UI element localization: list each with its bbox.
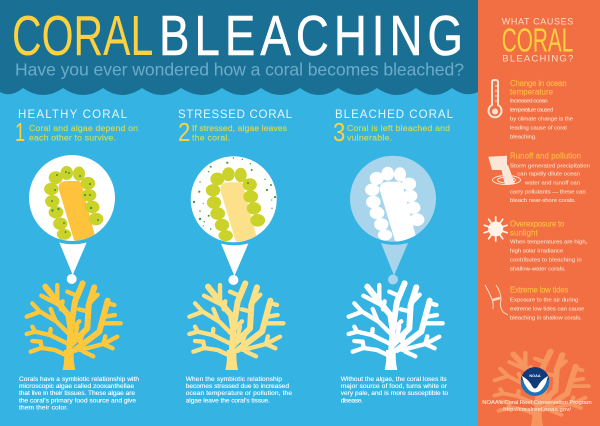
healthy coral description: [19, 376, 139, 411]
bleached coral description: [341, 376, 448, 404]
column 2 heading: STRESSED CORAL: [178, 109, 293, 121]
cause: overexposure to sunlight: [510, 220, 588, 272]
cause: change in ocean temperature: Change in ocean: [510, 79, 567, 88]
cause: change in ocean temperature: by climate change is the: [510, 116, 574, 122]
magnifier: bleached coral polyp: [350, 156, 436, 284]
column 3 heading: BLEACHED CORAL: [335, 109, 454, 121]
column 1 heading: HEALTHY CORAL: [18, 109, 128, 121]
cause: change in ocean temperature: temperature caused: [510, 108, 553, 114]
sidebar heading: WHAT CAUSES: [502, 16, 573, 26]
healthy coral description: the coral's primary food source and give: [19, 397, 136, 404]
cause: overexposure to sunlight: When temperatures are high,: [510, 240, 588, 246]
cause: extreme low tides: Exposure to the air during: [510, 298, 578, 304]
stressed coral description: When the symbiotic relationship: [186, 376, 282, 383]
header band with scalloped edge: [0, 0, 478, 95]
title: [12, 3, 463, 68]
stressed coral description: algae leave the coral's tissue.: [186, 397, 270, 404]
bleached coral description: Without the algae, the coral loses its: [341, 376, 447, 383]
column 1 heading: each other to survive.: [29, 132, 116, 142]
icon: low tide shoreline: [485, 285, 508, 315]
cause: runoff and pollution: water and runoff can: [524, 181, 580, 187]
icon: runoff bucket and ripples: [488, 156, 520, 185]
cause: change in ocean temperature: Increased ocean: [510, 99, 548, 105]
icon: sun: [484, 217, 507, 241]
NOAA program credit: [482, 400, 592, 413]
NOAA program credit: http://coralreef.noaa.gov/: [503, 407, 571, 413]
column 1 heading: Coral and algae depend on: [29, 123, 138, 133]
cause: change in ocean temperature: [510, 79, 574, 140]
column 1 heading: [15, 109, 138, 147]
magnifier: stressed coral polyp: [191, 156, 277, 285]
subtitle: Have you ever wondered how a coral becomes bleached?: [15, 60, 464, 80]
cause: runoff and pollution: bleach near-shore corals.: [510, 198, 576, 204]
healthy coral description: that live in their tissues. These algae are: [19, 390, 135, 397]
sidebar panel: what causes coral bleaching: [478, 0, 600, 426]
cause: extreme low tides: bleaching in shallow corals.: [510, 316, 582, 322]
icon: thermometer: [489, 80, 502, 117]
cause: change in ocean temperature: leading cause of coral: [510, 126, 567, 132]
column 3 heading: vulnerable.: [347, 132, 392, 142]
column 2 heading: [178, 109, 293, 147]
cause: overexposure to sunlight: high solar irradiance: [510, 249, 564, 255]
bleached coral description: very pale, and is more susceptible to: [341, 390, 448, 397]
cause: runoff and pollution: [510, 151, 590, 204]
column 2 heading: If stressed, algae leaves: [192, 123, 288, 133]
healthy coral description: them their color.: [19, 404, 68, 411]
cause: extreme low tides: [510, 285, 585, 322]
NOAA program credit: NOAA's Coral Reef Conservation Program: [482, 400, 592, 406]
cause: overexposure to sunlight: shallow-water corals.: [510, 266, 566, 272]
cause: runoff and pollution: Runoff and pollution: [510, 151, 581, 160]
column 3 heading: 3: [333, 118, 345, 147]
cause: extreme low tides: Extreme low tides: [510, 285, 568, 294]
bleached coral description: major source of food, turns white or: [341, 383, 448, 390]
cause: change in ocean temperature: bleaching.: [510, 134, 537, 140]
NOAA logo: NOAA: [529, 374, 541, 378]
column 2 heading: 2: [178, 118, 190, 147]
column 3 heading: Coral is left bleached and: [347, 123, 450, 133]
stressed coral illustration: [189, 283, 283, 370]
cause: runoff and pollution: Storm generated precipitation: [510, 163, 590, 169]
cause: overexposure to sunlight: sunlight: [510, 229, 539, 238]
cause: runoff and pollution: can rapidly dilute ocean: [517, 172, 580, 178]
title: CORAL: [12, 3, 153, 68]
stressed coral description: ocean temperature or pollution, the: [186, 390, 292, 397]
stressed coral description: [186, 376, 292, 404]
NOAA logo: [521, 367, 549, 396]
bleached coral description: disease.: [341, 397, 363, 404]
title: BLEACHING: [159, 3, 463, 67]
healthy coral illustration: [27, 283, 121, 370]
cause: change in ocean temperature: temperature: [510, 88, 553, 97]
cause: runoff and pollution: carry pollutants — these can: [510, 190, 586, 196]
bleached coral illustration: [349, 283, 443, 370]
cause: overexposure to sunlight: Overexposure to: [510, 220, 565, 229]
healthy coral description: Corals have a symbiotic relationship with: [19, 376, 139, 383]
column 3 heading: [333, 109, 454, 147]
magnifier: healthy coral polyp: [29, 155, 115, 284]
column 2 heading: the coral.: [192, 132, 230, 142]
sidebar heading: BLEACHING?: [502, 53, 573, 64]
decorative coral behind logo: [495, 351, 589, 426]
stressed coral description: becomes stressed due to increased: [186, 383, 289, 390]
column 1 heading: 1: [15, 118, 25, 147]
sidebar heading: CORAL: [502, 22, 573, 59]
cause: extreme low tides: extreme low tides can cause: [510, 306, 585, 312]
healthy coral description: microscopic algae called zooxanthellae: [19, 383, 134, 390]
cause: overexposure to sunlight: contributes to bleaching in: [510, 258, 582, 264]
